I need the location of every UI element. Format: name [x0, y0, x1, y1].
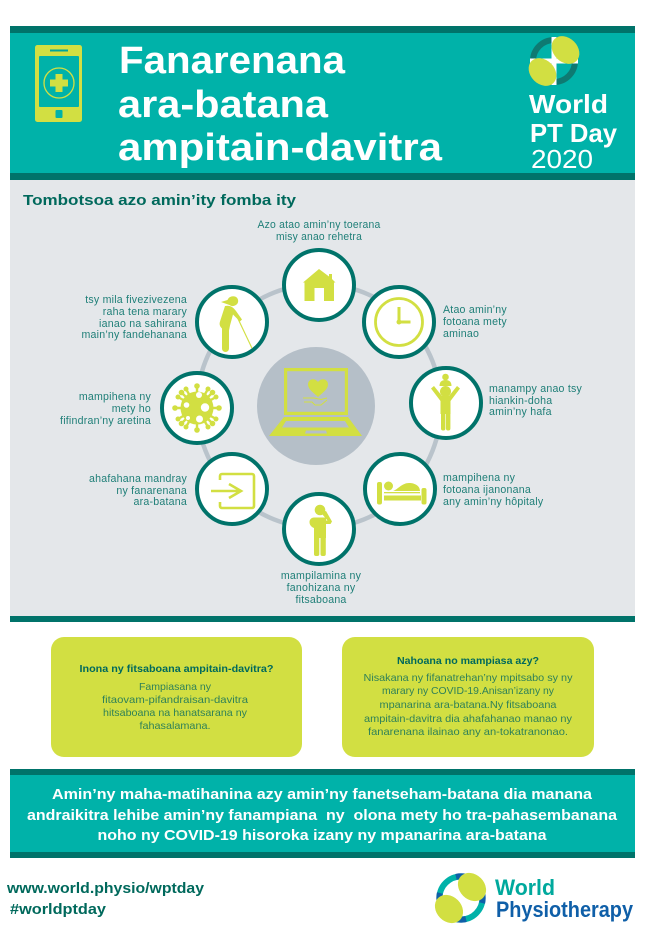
label: enter: ara-batana — [134, 496, 187, 508]
label: home — [258, 219, 380, 243]
label: home: Azo atao amin’ny toerana — [258, 219, 380, 231]
ring connecting the icons — [197, 284, 441, 528]
icon: laptop with heart in hand — [257, 347, 375, 465]
label: bed: fotoana ijanonana — [443, 484, 531, 496]
heading: Tombotsoa azo amin’ity fomba ity — [23, 192, 297, 209]
banner: closing message: Amin’ny maha-matihanina azy amin’ny fanetseham-batana dia manana — [52, 787, 593, 803]
label: thinking person — [281, 570, 362, 606]
icon: older person with cane — [220, 296, 252, 352]
banner: closing message: andraikitra lehibe amin’ny fanampiana ny olona mety ho tra-pahasembanana — [27, 808, 618, 824]
World PT Day 2020 logo: World — [529, 89, 608, 119]
label: thinking person: mampilamina ny — [281, 570, 362, 582]
icon: adult carrying child — [431, 374, 460, 430]
label: home: misy anao rehetra — [276, 231, 362, 243]
label: enter: ahafahana mandray — [89, 473, 187, 485]
label: child on shoulders: manampy anao tsy — [489, 383, 583, 395]
icon: clock — [376, 298, 422, 346]
item: clock — [364, 287, 434, 357]
item: thinking person — [284, 494, 354, 564]
card text: fanarenana ilainao any an-tokatranonao. — [368, 727, 568, 738]
icon: person in bed — [377, 482, 426, 504]
footer links: www.world.physio/wptday — [6, 881, 204, 897]
World PT Day 2020 logo: PT Day — [530, 118, 618, 148]
card heading: Nahoana no mampiasa azy? — [397, 656, 539, 667]
World Physiotherapy logo: World — [495, 875, 555, 900]
label: thinking person: fitsaboana — [295, 594, 347, 606]
icon: virus — [172, 383, 222, 433]
card text — [102, 682, 248, 732]
item: child on shoulders — [411, 368, 481, 438]
World PT Day 2020 logo — [523, 31, 618, 174]
World PT Day 2020 logo: 2020 — [531, 144, 593, 174]
card text — [364, 673, 573, 738]
banner: closing message — [10, 769, 635, 858]
icon: thinking person — [310, 505, 332, 556]
card heading: Inona ny fitsaboana ampitain-davitra? — [80, 664, 274, 675]
icon: arrow into box — [211, 474, 254, 508]
banner: closing message: noho ny COVID-19 hisoroka izany ny mpanarina ara-batana — [98, 828, 547, 844]
card text: Nisakana ny fifanatrehan’ny mpitsabo sy ny — [364, 673, 573, 684]
label: child on shoulders: hiankin-doha — [489, 395, 552, 407]
label: older person with cane: ianao na sahirana — [99, 318, 187, 330]
header banner — [10, 26, 635, 180]
card text: ampitain-davitra dia ahafahanao manao ny — [364, 714, 573, 725]
label: older person with cane: main’ny fandehanana — [82, 329, 187, 341]
label: enter: ny fanarenana — [116, 485, 187, 497]
label: thinking person: fanohizana ny — [287, 582, 356, 594]
label: clock: aminao — [443, 328, 479, 340]
label: clock — [443, 304, 507, 340]
panel: benefits — [10, 180, 635, 622]
label: clock: Atao amin’ny — [443, 304, 507, 316]
icon: phone with medical cross — [35, 45, 82, 122]
title: Fanarenana — [119, 40, 346, 82]
label: enter — [89, 473, 187, 508]
label: clock: fotoana mety — [443, 316, 507, 328]
title — [118, 40, 443, 169]
item: virus — [162, 373, 232, 443]
label: virus: mety ho — [112, 403, 151, 415]
label: older person with cane — [82, 294, 187, 341]
item: enter — [197, 454, 267, 524]
label: bed — [443, 472, 544, 508]
label: virus — [60, 391, 151, 427]
label: virus: mampihena ny — [79, 391, 151, 403]
footer links — [6, 881, 204, 918]
card: why use it — [342, 637, 594, 757]
World Physiotherapy logo: Physiotherapy — [496, 897, 634, 922]
label: bed: mampihena ny — [443, 472, 516, 484]
card: what is telehealth — [51, 637, 302, 757]
footer links: #worldptday — [10, 902, 106, 918]
card text: fitaovam-pifandraisan-davitra — [102, 695, 248, 706]
item: home — [284, 250, 354, 320]
label: bed: any amin’ny hôpitaly — [443, 496, 544, 508]
item: bed — [365, 454, 435, 524]
label: virus: fifindran’ny aretina — [60, 415, 151, 427]
card text: Fampiasana ny — [139, 682, 212, 693]
card text: fahasalamana. — [140, 721, 210, 732]
card text: mpanarina ara-batana.Ny fitsaboana — [380, 700, 557, 711]
title: ara-batana — [118, 84, 329, 126]
icon: house — [303, 269, 336, 301]
logo symbol — [429, 867, 492, 929]
label: child on shoulders: amin’ny hafa — [489, 406, 552, 418]
label: older person with cane: raha tena marary — [103, 306, 187, 318]
label: older person with cane: tsy mila fivezivezena — [85, 294, 187, 306]
item: older person with cane — [197, 287, 267, 357]
logo symbol — [523, 31, 585, 91]
label: child on shoulders — [489, 383, 583, 418]
card text: hitsaboana na hanatsarana ny — [103, 708, 248, 719]
World Physiotherapy logo — [429, 867, 634, 929]
card text: marary ny COVID-19.Anisan’izany ny — [382, 686, 555, 697]
title: ampitain-davitra — [118, 127, 443, 169]
